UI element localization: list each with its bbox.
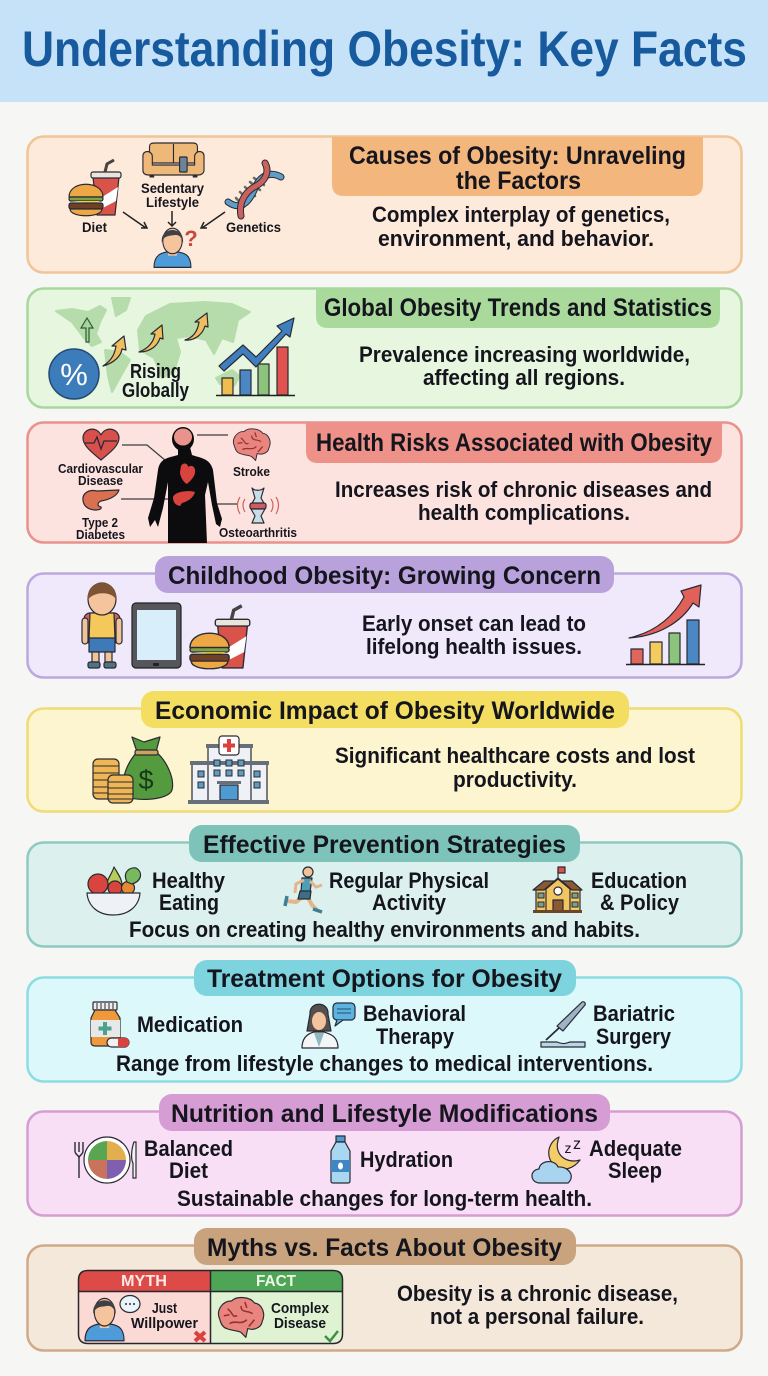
heading: causes: Causes of Obesity: Unraveling xyxy=(349,142,686,170)
text: health description: health complications. xyxy=(418,500,630,525)
heading: economic: Economic Impact of Obesity Worldwide xyxy=(155,697,615,725)
icon: moon, cloud and zzz xyxy=(532,1136,581,1183)
text: economic description: productivity. xyxy=(453,767,577,792)
icon: tablet xyxy=(132,603,181,668)
callout: fact card: FACT xyxy=(256,1273,296,1290)
icon: plate with fork and knife xyxy=(75,1137,136,1183)
heading: causes: the Factors xyxy=(456,167,581,195)
text: global description xyxy=(359,342,690,390)
text: myths description xyxy=(397,1281,678,1329)
icon: person with question mark: ? xyxy=(184,226,198,251)
icon: fruit bowl xyxy=(87,867,141,915)
label: just willpower: Just xyxy=(152,1300,177,1317)
text: treatment description: Range from lifestyle changes to medical interventions. xyxy=(116,1051,653,1076)
heading: nutrition: Nutrition and Lifestyle Modifications xyxy=(171,1100,598,1128)
title banner xyxy=(0,0,768,102)
label: regular physical activity: Regular Physical xyxy=(329,868,489,893)
callout: myth card: MYTH xyxy=(121,1273,167,1290)
label: rising globally xyxy=(122,361,190,402)
icon: knee joint xyxy=(238,488,278,523)
label: sedentary lifestyle: Sedentary xyxy=(141,180,204,196)
label: just willpower xyxy=(131,1300,198,1332)
label: sedentary lifestyle: Lifestyle xyxy=(146,194,199,210)
label: balanced diet: Diet xyxy=(169,1158,209,1183)
label: cardiovascular disease: Disease xyxy=(78,473,123,488)
text: childhood description: lifelong health issues. xyxy=(366,634,582,659)
text: global description: Prevalence increasing worldwide, xyxy=(359,342,690,367)
panel: myths vs facts xyxy=(28,1228,742,1350)
icon: school xyxy=(533,867,582,913)
icon: runner xyxy=(285,867,322,912)
icon: brain xyxy=(219,1298,264,1337)
panel: economic impact xyxy=(28,691,742,812)
text: health description xyxy=(335,477,712,525)
label: balanced diet: Balanced xyxy=(144,1136,233,1161)
text: prevention description: Focus on creating healthy environments and habits. xyxy=(129,917,640,942)
label: type 2 diabetes xyxy=(76,515,125,542)
panel: global trends xyxy=(28,288,742,408)
icon: heart with pulse xyxy=(83,429,119,460)
heading: global trends xyxy=(316,289,720,328)
label: complex disease: Complex xyxy=(271,1300,330,1317)
label: healthy eating xyxy=(152,868,226,915)
label: adequate sleep xyxy=(589,1136,682,1183)
icon: world map xyxy=(56,298,250,392)
text: myths description: Obesity is a chronic disease, xyxy=(397,1281,678,1306)
icon: person with question mark xyxy=(154,226,198,267)
text: childhood description xyxy=(362,611,586,659)
label: hydration: Hydration xyxy=(360,1147,453,1172)
heading: prevention: Effective Prevention Strategies xyxy=(203,831,566,859)
icon: green check xyxy=(325,1331,338,1341)
heading: childhood: Childhood Obesity: Growing Concern xyxy=(168,562,601,590)
icon: body silhouette with organs xyxy=(148,427,222,543)
callout: myth card xyxy=(79,1271,210,1343)
label: behavioral therapy: Behavioral xyxy=(363,1001,466,1026)
label: type 2 diabetes: Diabetes xyxy=(76,527,125,542)
heading: causes xyxy=(332,137,703,196)
callout: fact card xyxy=(210,1271,342,1343)
icon: rising arrows on map xyxy=(81,313,208,366)
text: childhood description: Early onset can lead to xyxy=(362,611,586,636)
label: sedentary lifestyle xyxy=(141,180,204,210)
text: causes description: Complex interplay of genetics, xyxy=(372,202,670,227)
label: genetics: Genetics xyxy=(226,219,281,235)
label: rising globally: Rising xyxy=(130,361,181,383)
label: healthy eating: Eating xyxy=(159,890,219,915)
text: economic description: Significant healthcare costs and lost xyxy=(335,743,696,768)
icon: person with speech bubble xyxy=(85,1296,140,1341)
icon: medication bottle xyxy=(91,1002,129,1047)
chart: rising bars xyxy=(216,318,295,396)
label: diet: Diet xyxy=(82,219,107,235)
label: bariatric surgery: Bariatric xyxy=(593,1001,675,1026)
icon: burger and drink xyxy=(69,160,121,216)
label: bariatric surgery xyxy=(593,1001,675,1049)
label: regular physical activity: Activity xyxy=(372,890,447,915)
panel: treatment options xyxy=(28,960,742,1082)
label: just willpower: Willpower xyxy=(131,1315,198,1332)
panel: nutrition and lifestyle xyxy=(28,1094,742,1216)
label: rising globally: Globally xyxy=(122,380,190,402)
icon: hospital building xyxy=(188,736,269,804)
label: behavioral therapy: Therapy xyxy=(376,1024,455,1049)
text: global description: affecting all regions. xyxy=(423,365,625,390)
panel: health risks xyxy=(28,422,742,543)
label: cardiovascular disease xyxy=(58,461,143,488)
icon: scalpel xyxy=(541,1002,585,1047)
text: myths description: not a personal failure. xyxy=(430,1304,644,1329)
heading: global trends: Global Obesity Trends and Statistics xyxy=(324,294,712,322)
icon: pancreas xyxy=(83,490,119,510)
heading: health risks xyxy=(306,423,722,463)
label: bariatric surgery: Surgery xyxy=(596,1024,672,1049)
text: causes description: environment, and behavior. xyxy=(378,226,654,251)
icon: percent badge xyxy=(49,349,99,399)
icon: money bag and coins xyxy=(93,737,173,803)
label: cardiovascular disease: Cardiovascular xyxy=(58,461,143,476)
panel: causes of obesity xyxy=(28,136,742,272)
label: type 2 diabetes: Type 2 xyxy=(82,515,118,530)
icon: brain stroke xyxy=(233,429,270,461)
icon: child with backpack xyxy=(82,583,122,668)
label: complex disease: Disease xyxy=(274,1315,326,1332)
icon: dna helix xyxy=(228,163,281,216)
panel: childhood obesity xyxy=(28,556,742,678)
label: healthy eating: Healthy xyxy=(152,868,226,893)
icon: moon, cloud and zzz: z xyxy=(564,1140,572,1156)
icon: red cross xyxy=(195,1332,205,1341)
chart: upward bars with arrow xyxy=(626,585,705,664)
text: economic description xyxy=(335,743,696,792)
label: behavioral therapy xyxy=(363,1001,466,1049)
label: education and policy xyxy=(591,868,687,915)
label: medication: Medication xyxy=(137,1012,243,1037)
text: health description: Increases risk of chronic diseases and xyxy=(335,477,712,502)
label: adequate sleep: Sleep xyxy=(608,1158,662,1183)
label: regular physical activity xyxy=(329,868,489,915)
label: balanced diet xyxy=(144,1136,233,1183)
label: adequate sleep: Adequate xyxy=(589,1136,682,1161)
icon: percent badge: % xyxy=(60,357,88,392)
icon: moon, cloud and zzz: z xyxy=(573,1136,581,1153)
text: causes description xyxy=(372,202,670,251)
label: complex disease xyxy=(271,1300,330,1332)
panel: prevention strategies xyxy=(28,825,742,946)
icon: water bottle xyxy=(331,1136,350,1183)
label: osteoarthritis: Osteoarthritis xyxy=(219,525,297,540)
heading: myths: Myths vs. Facts About Obesity xyxy=(207,1234,562,1262)
card frame xyxy=(78,1270,342,1344)
heading: health risks: Health Risks Associated with Obesity xyxy=(316,429,712,457)
icon: burger and drink xyxy=(190,606,250,669)
connector lines: organs xyxy=(121,435,237,504)
icon: doctor with speech bubble xyxy=(302,1003,355,1048)
label: education and policy: & Policy xyxy=(600,890,680,915)
heading: treatment: Treatment Options for Obesity xyxy=(207,965,562,993)
icon: sofa with remote xyxy=(143,143,204,178)
icon: money bag and coins: $ xyxy=(138,765,154,795)
label: education and policy: Education xyxy=(591,868,687,893)
arrows: causes converge xyxy=(123,211,225,228)
label: stroke: Stroke xyxy=(233,464,270,479)
text: nutrition description: Sustainable changes for long-term health. xyxy=(177,1186,592,1211)
